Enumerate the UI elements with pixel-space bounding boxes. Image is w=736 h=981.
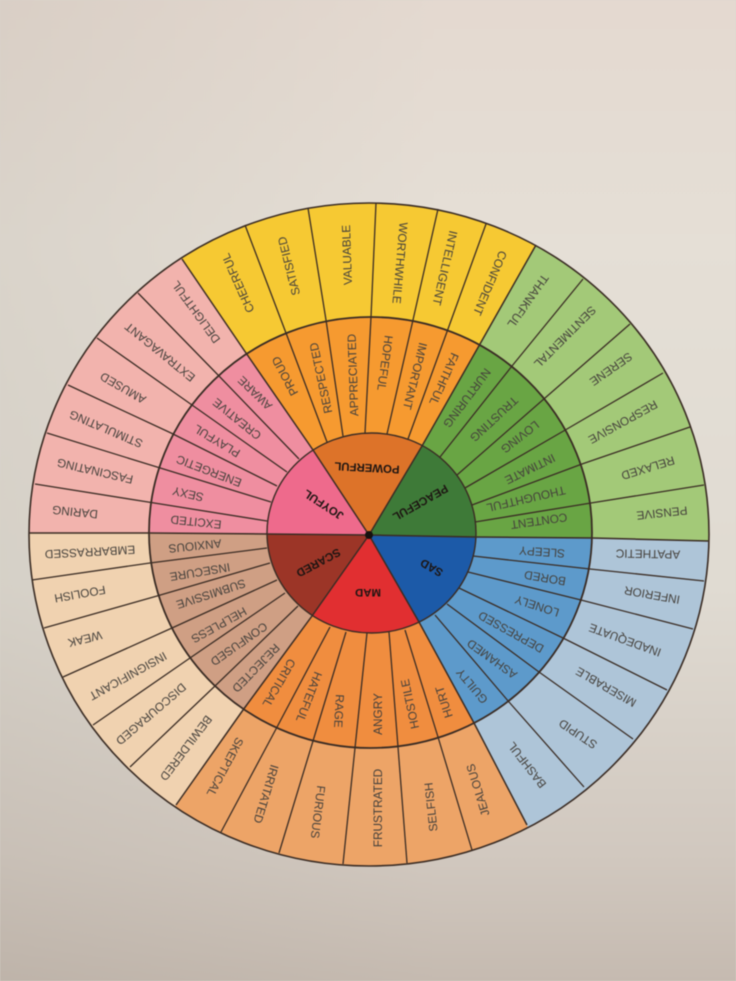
sector: powerful (yellow and orange): VALUABLE [339, 225, 355, 285]
sector: mad (orange and red): HATEFUL [293, 670, 325, 725]
sector: sad (blue): LONELY [513, 592, 561, 620]
sector: mad (orange and red): RAGE [331, 694, 347, 728]
sector: scared (tan and brown): WEAK [66, 628, 104, 650]
sector: powerful (yellow and orange): WORTHWHILE [389, 222, 411, 304]
sector: joyful (pink): DARING [51, 503, 99, 521]
sector: peaceful (green): NURTURING [440, 366, 494, 430]
core emotion labels: SAD [419, 556, 445, 578]
sector: mad (orange and red): IRRITATED [250, 763, 282, 825]
sector: mad (orange and red): HURT [432, 684, 456, 720]
sector: joyful (pink): CREATIVE [210, 395, 264, 443]
sector boundaries and ring outlines [29, 203, 709, 866]
sector: joyful (pink): PLAYFUL [191, 421, 243, 460]
sector: mad (orange and red): FRUSTRATED [371, 769, 385, 847]
sector: sad (blue): MISERABLE [573, 664, 639, 710]
core emotion labels: MAD [355, 586, 381, 598]
sector: sad (blue): DEPRESSED [476, 608, 546, 656]
sector: sad (blue): GUILTY [453, 665, 491, 706]
sector: sad (blue): ASHAMED [464, 636, 520, 682]
sector: peaceful (green): TRUSTING [467, 393, 521, 445]
sector: joyful (pink): DELIGHTFUL [169, 278, 223, 346]
sector: mad (orange and red): CRITICAL [259, 656, 298, 710]
core emotion labels: POWERFUL [334, 459, 400, 475]
sector: joyful (pink): STIMULATING [67, 407, 145, 451]
sector: joyful (pink): FASCINATING [56, 455, 134, 487]
sector: joyful (pink): EXTRAVAGANT [122, 319, 198, 385]
sector: scared (tan and brown): INSIGNIFICANT [87, 649, 169, 703]
sector: peaceful (green): SENTIMENTAL [531, 303, 599, 371]
sector: joyful (pink): ENERGETIC [174, 452, 244, 490]
sector: powerful (yellow and orange): APPRECIATED [345, 334, 361, 416]
sector: sad (blue): APATHETIC [615, 546, 680, 562]
sector: mad (orange and red) [175, 538, 528, 866]
sector: peaceful (green): PENSIVE [636, 503, 688, 523]
sector: sad (blue): SLEEPY [518, 543, 565, 561]
sector: sad (blue): INADEQUATE [587, 620, 663, 660]
sector: powerful (yellow and orange): FAITHFUL [426, 351, 462, 408]
sector: powerful (yellow and orange): SATISFIED [275, 235, 303, 297]
sector: mad (orange and red): SELFISH [421, 782, 441, 832]
sector: joyful (pink): AWARE [235, 373, 275, 413]
sector: scared (tan and brown): DISCOURAGED [113, 680, 189, 748]
core emotion labels: SCARED [294, 545, 342, 579]
sector: peaceful (green): LOVING [498, 418, 542, 456]
core emotion labels: JOYFUL [302, 487, 346, 521]
sector: powerful (yellow and orange): RESPECTED [307, 341, 335, 415]
sector: powerful (yellow and orange): HOPEFUL [374, 334, 396, 392]
sector: peaceful (green): SERENE [587, 349, 635, 389]
sector: scared (tan and brown): SUBMISSIVE [174, 576, 247, 612]
sector: sad (blue): STUPID [556, 716, 600, 752]
sector: scared (tan and brown) [30, 533, 367, 806]
center dot [365, 531, 373, 539]
sector: scared (tan and brown): FOOLISH [53, 583, 107, 605]
sector: joyful (pink): AMUSED [98, 369, 148, 407]
core emotion labels [294, 459, 450, 598]
sector: sad (blue): BASHFUL [504, 739, 549, 791]
sector: peaceful (green): THOUGHTFUL [485, 483, 567, 515]
sector: scared (tan and brown): INSECURE [169, 560, 231, 584]
sector: peaceful (green): THANKFUL [504, 271, 552, 331]
sector: powerful (yellow and orange) [182, 203, 535, 532]
sector: peaceful (green): CONTENT [510, 510, 568, 532]
core emotion labels: PEACEFUL [390, 482, 450, 522]
sector: peaceful (green) [371, 246, 709, 541]
sector: scared (tan and brown): BEWILDERED [157, 713, 215, 783]
sector: powerful (yellow and orange): INTELLIGENT [430, 229, 460, 307]
sector: joyful (pink): SEXY [171, 484, 205, 504]
sector: scared (tan and brown): ANXIOUS [168, 536, 222, 556]
sector: mad (orange and red): SKEPTICAL [203, 735, 246, 799]
sector: scared (tan and brown): HELPLESS [189, 604, 249, 646]
sector: sad (blue): BORED [523, 568, 567, 588]
sector: mad (orange and red): ANGRY [371, 693, 385, 735]
sector: powerful (yellow and orange): PROUD [269, 354, 301, 398]
sector: scared (tan and brown): REJECTED [229, 641, 283, 695]
sector: powerful (yellow and orange): IMPORTANT [400, 341, 430, 411]
sector: mad (orange and red): FURIOUS [308, 785, 328, 839]
sector: scared (tan and brown): CONFUSED [208, 619, 270, 669]
sector: powerful (yellow and orange): CHEERFUL [218, 251, 257, 315]
sector: peaceful (green): RESPONSIVE [586, 397, 660, 447]
sector: joyful (pink): EXCITED [170, 512, 222, 532]
sector: powerful (yellow and orange): CONFIDENT [470, 249, 510, 317]
sector: mad (orange and red): JEALOUS [463, 762, 493, 818]
sector: peaceful (green): RELAXED [620, 453, 676, 483]
sector: mad (orange and red): HOSTILE [398, 678, 422, 730]
sector: joyful (pink) [30, 259, 366, 535]
sector: peaceful (green): INTIMATE [502, 451, 557, 487]
sector: sad (blue) [371, 535, 708, 827]
sector: scared (tan and brown): EMBARRASSED [44, 543, 136, 561]
sector: sad (blue): INFERIOR [623, 583, 681, 607]
